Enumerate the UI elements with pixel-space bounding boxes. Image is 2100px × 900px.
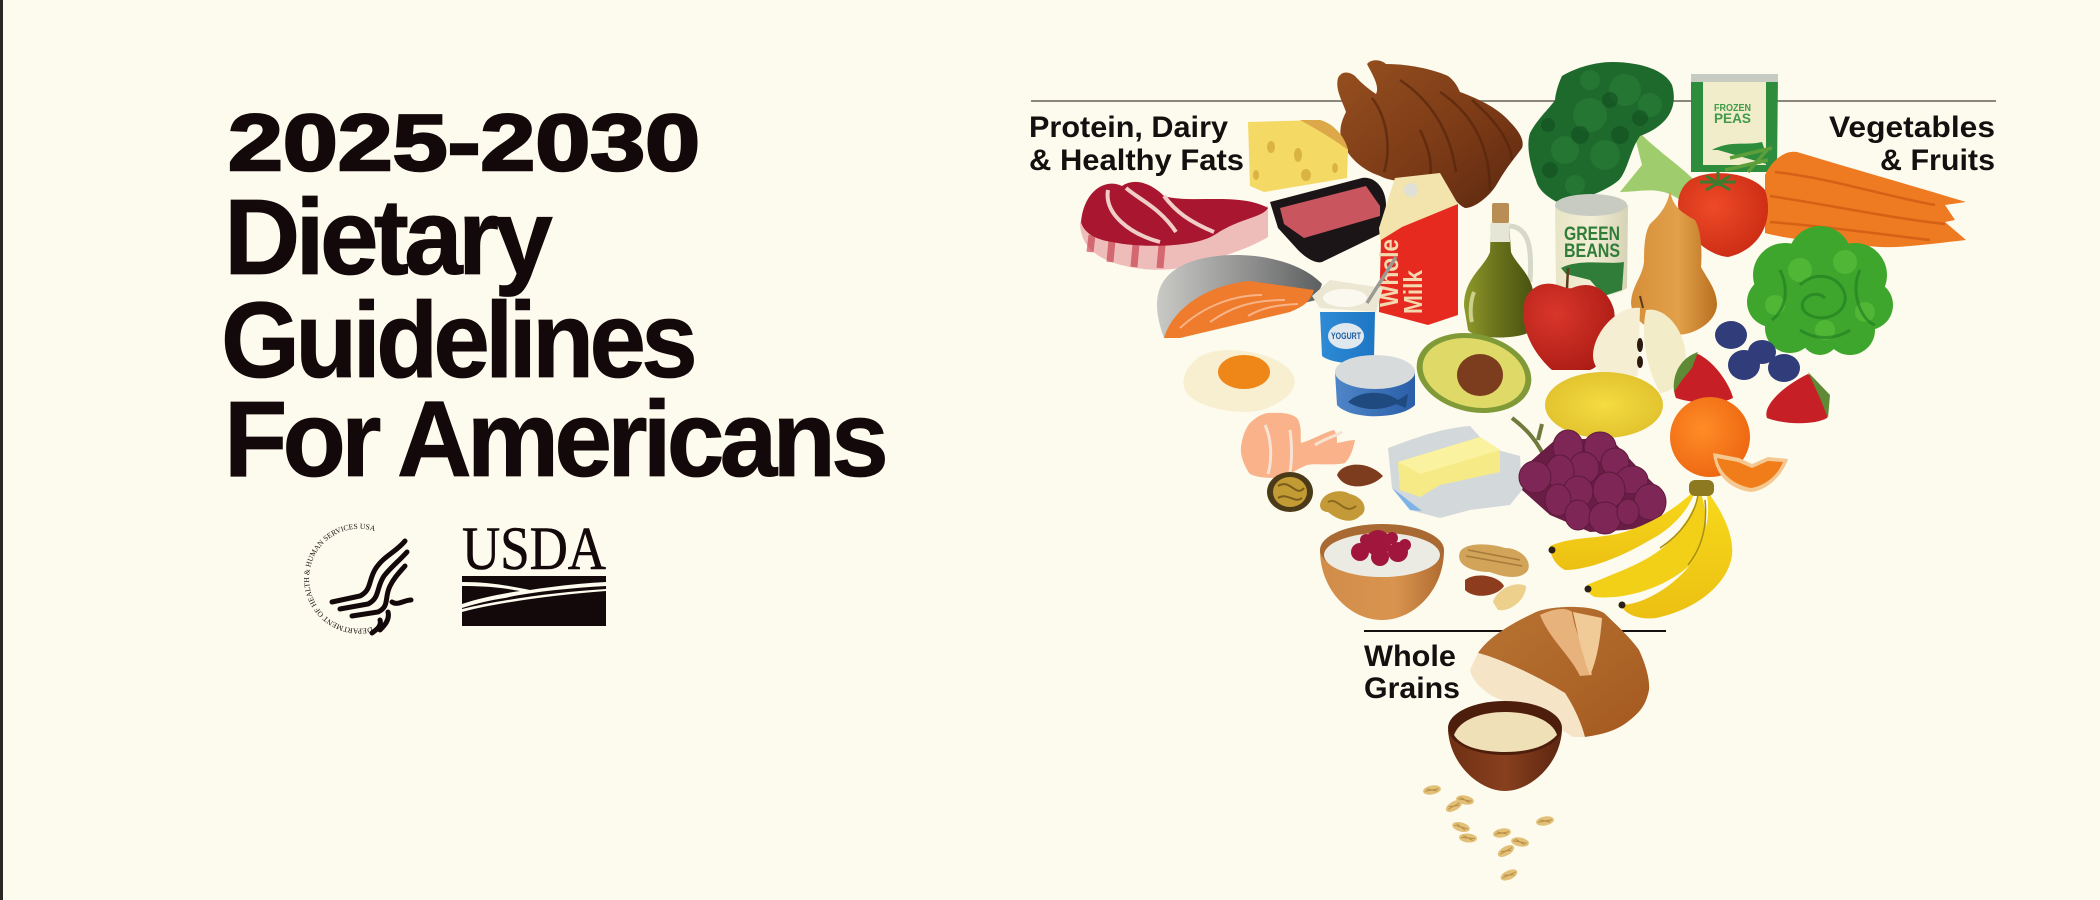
food: bananas [1548, 480, 1732, 618]
label: vegetables and fruits: & Fruits [1880, 144, 1995, 177]
food: yogurt cup [1312, 257, 1396, 363]
food: yogurt cup: YOGURT [1331, 331, 1361, 341]
food: ground meat tray [1270, 178, 1386, 262]
label: protein dairy and healthy fats [1029, 111, 1244, 177]
label: vegetables and fruits: Vegetables [1829, 111, 1995, 144]
logo: USDA [462, 516, 606, 626]
food: tuna can [1335, 355, 1415, 416]
food: broccoli [1528, 62, 1696, 204]
logo: HHS seal: DEPARTMENT OF HEALTH & HUMAN SERVICES USA [304, 524, 375, 634]
food: chicken [1337, 60, 1523, 208]
food: bread loaf [1470, 607, 1649, 737]
label: protein dairy and healthy fats: Protein, Dairy [1029, 111, 1228, 144]
food: green beans can [1555, 194, 1628, 296]
food: pale almond [1493, 584, 1526, 610]
food: frozen peas bag [1691, 74, 1778, 172]
food: lettuce [1747, 226, 1893, 355]
food: carrots [1725, 148, 1966, 247]
left edge border [0, 0, 3, 900]
food: bowl with cranberries [1320, 524, 1444, 620]
label: vegetables and fruits [1829, 111, 1995, 177]
food: brown bowl with oats [1448, 701, 1562, 791]
food: salmon [1157, 255, 1322, 338]
food: avocado [1409, 323, 1539, 423]
food: almond [1337, 465, 1383, 486]
label: whole grains: Whole [1364, 640, 1456, 673]
food: milk carton: Milk [1398, 270, 1428, 314]
category rule: whole grains [1364, 630, 1666, 632]
food: butter on wrapper [1388, 426, 1522, 518]
title block [221, 98, 885, 499]
food: green beans can: GREEN [1564, 224, 1620, 245]
food: tomato [1678, 172, 1768, 257]
label: protein dairy and healthy fats: & Healthy Fats [1029, 144, 1244, 177]
food: blueberries [1715, 321, 1800, 382]
label: whole grains [1364, 640, 1460, 705]
food: brazil nut [1465, 575, 1504, 596]
food: apple [1523, 268, 1615, 370]
title: years: 2025-2030 [228, 98, 700, 187]
food: frozen peas bag: PEAS [1714, 110, 1751, 126]
food: steak [1080, 182, 1268, 270]
label: whole grains: Grains [1364, 672, 1460, 705]
title: Dietary: Dietary [224, 176, 553, 297]
category rule: top [1031, 100, 1996, 102]
food: grapes [1512, 418, 1666, 534]
food: egg [1183, 350, 1295, 412]
food: walnut kernel [1320, 491, 1365, 521]
food: scattered oats [1422, 784, 1555, 883]
food: frozen peas bag: FROZEN [1714, 102, 1751, 114]
food: strawberries [1674, 352, 1830, 423]
food: butternut squash [1631, 190, 1717, 335]
food: peanut [1459, 544, 1529, 577]
title: Guidelines: Guidelines [221, 279, 694, 400]
logo: USDA: USDA [462, 516, 606, 583]
food: orange [1670, 397, 1788, 492]
food: milk carton: Whole [1374, 239, 1404, 307]
food: apple halves [1593, 296, 1686, 393]
logo: HHS seal [304, 524, 414, 636]
title: For Americans: For Americans [224, 378, 885, 499]
food: green beans can: BEANS [1564, 241, 1620, 262]
food: cheese [1248, 120, 1348, 192]
food: milk carton [1374, 173, 1458, 325]
food: walnut in shell [1267, 472, 1313, 512]
food: olive oil bottle [1464, 203, 1534, 338]
food: shrimp [1241, 413, 1355, 478]
food: yellow potato [1545, 372, 1663, 438]
